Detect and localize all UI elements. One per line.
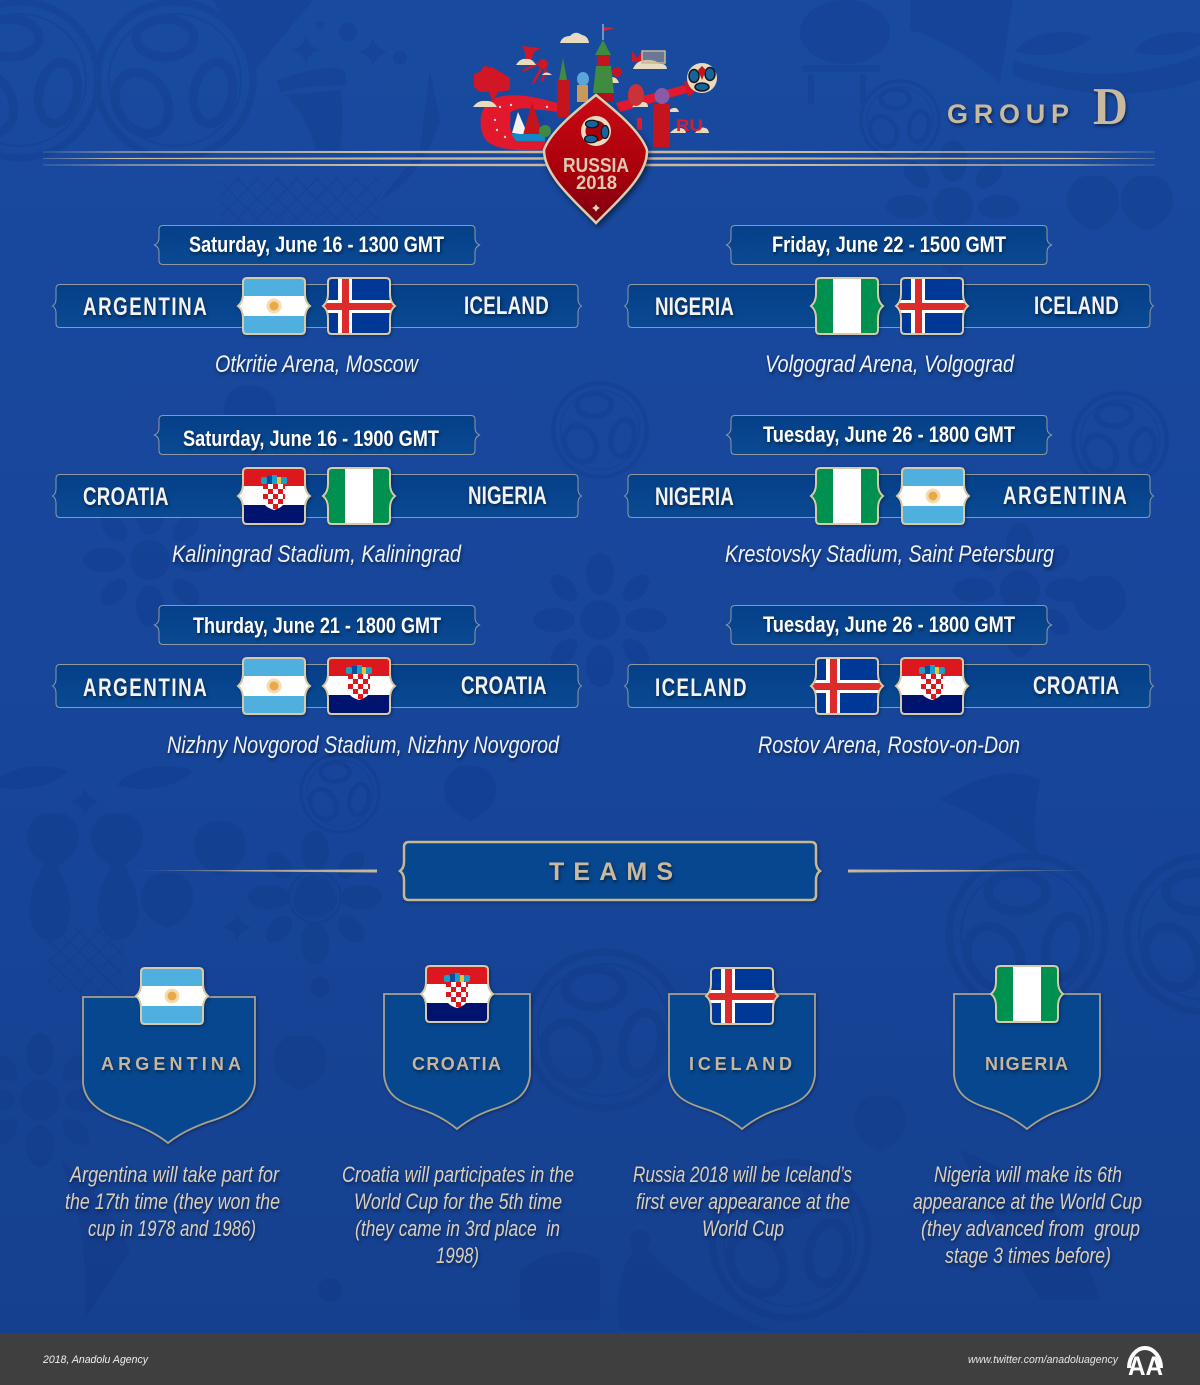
team card: Argentina [65,967,280,1241]
match text: ICELAND [655,673,747,702]
description: Argentina will take part for [68,1162,280,1187]
match text [655,232,1119,378]
match text: Thurday, June 21 - 1800 GMT [193,613,441,638]
emblem text [563,155,629,194]
match text: Krestovsky Stadium, Saint Petersburg [725,541,1055,568]
team card: Nigeria: NIGERIA [985,1054,1068,1074]
emblem: Russia 2018 [544,95,647,223]
footer [0,1333,1200,1385]
heading: Group D [947,78,1128,136]
heading: Teams [120,842,1106,900]
description: (they came in 3rd place in [355,1216,560,1241]
description [65,1162,280,1241]
description: Russia 2018 will be Iceland’s [633,1162,852,1187]
match text: Nizhny Novgorod Stadium, Nizhny Novgorod [167,732,560,759]
flags [810,277,969,335]
description [913,1162,1142,1268]
match text: NIGERIA [468,481,547,510]
match text [83,426,547,568]
illustration: Russian landmarks skyline [473,24,717,150]
match text: NIGERIA [655,482,734,511]
match text [655,612,1119,759]
footer: 2018, Anadolu Agency [42,1354,149,1366]
flags [810,467,970,525]
description [633,1162,852,1241]
emblem text: RUSSIA [563,155,629,177]
panel: match Nigeria v Argentina [624,416,1154,568]
match text: Friday, June 22 - 1500 GMT [772,232,1006,257]
match text: Kaliningrad Stadium, Kaliningrad [172,541,462,568]
team card: Iceland [633,967,852,1241]
flags [810,657,969,715]
description: World Cup [702,1216,784,1241]
flags [237,467,396,525]
icon: Anadolu Agency logo: AA [1128,1351,1163,1381]
team card: Croatia [342,965,574,1268]
match text [655,422,1127,568]
match text: Otkritie Arena, Moscow [215,351,419,378]
description: stage 3 times before) [945,1243,1111,1268]
team card: Iceland: ICELAND [689,1054,792,1074]
team card: Croatia: CROATIA [412,1054,501,1074]
team card: Argentina: ARGENTINA [101,1054,241,1074]
flags [237,657,396,715]
description: appearance at the World Cup [913,1189,1142,1214]
description: (they advanced from group [921,1216,1140,1241]
description [342,1162,574,1268]
description: Croatia will participates in the [342,1162,574,1187]
decorative triple rule left and right [43,151,1155,166]
footer: www.twitter.com/anadoluagency [968,1354,1119,1366]
match text [83,232,549,378]
description: World Cup for the 5th time [354,1189,562,1214]
match text: Volgograd Arena, Volgograd [765,351,1015,378]
heading: Group D: D [1093,78,1128,136]
team card: Nigeria [913,965,1142,1268]
match text: Saturday, June 16 - 1300 GMT [189,232,444,257]
match text: CROATIA [461,671,547,700]
description: the 17th time (they won the [65,1189,280,1214]
description: 1998) [436,1243,479,1268]
match text: ICELAND [464,291,549,320]
match text [83,613,560,759]
description: Nigeria will make its 6th [934,1162,1122,1187]
match text: Tuesday, June 26 - 1800 GMT [763,422,1015,447]
panel: match Iceland v Croatia [624,606,1154,759]
match text: ICELAND [1034,291,1119,320]
match text: CROATIA [83,482,169,511]
emblem ball icon [581,116,611,146]
heading: Teams: TEAMS [549,858,673,886]
panel: match Argentina v Croatia [52,606,582,759]
match text: ARGENTINA [83,292,207,321]
flags [237,277,396,335]
match text: ARGENTINA [1003,481,1127,510]
RU mark: RU [676,116,703,135]
match text: Saturday, June 16 - 1900 GMT [183,426,439,451]
panel: match Nigeria v Iceland [624,226,1154,378]
description: first ever appearance at the [636,1189,850,1214]
match text: NIGERIA [655,292,734,321]
match text: Rostov Arena, Rostov-on-Don [758,732,1020,759]
football [687,63,717,93]
panel: match Argentina v Iceland [52,226,582,378]
emblem text: 2018 [576,173,617,194]
description: cup in 1978 and 1986) [88,1216,256,1241]
header: tournament logo and rules [43,24,1155,223]
match text: Tuesday, June 26 - 1800 GMT [763,612,1015,637]
heading: Group D: GROUP [947,99,1069,129]
panel: match Croatia v Nigeria [52,416,582,568]
match text: ARGENTINA [83,673,207,702]
match text: CROATIA [1033,671,1119,700]
